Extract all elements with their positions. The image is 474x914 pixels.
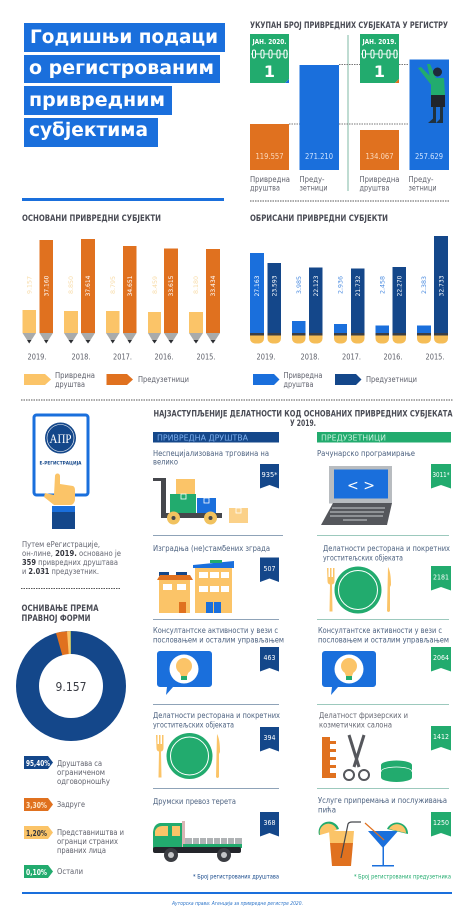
item: computer programming: Рачунарско програмирање: [317, 449, 415, 458]
bar: entrepreneurs 2020: 271.210: [305, 152, 333, 161]
year labels: [256, 352, 444, 362]
label: companies 2019: друштва: [360, 184, 390, 192]
legend: representative offices: огранци страних: [57, 837, 118, 846]
eraser pencil chart: 3.985: [295, 276, 303, 294]
eraser pencil chart: 27.163: [253, 276, 261, 296]
ribbon: 507: 507: [264, 565, 276, 573]
ribbon: 1412: 1412: [433, 733, 449, 741]
bar: entrepreneurs 2020: [300, 65, 339, 170]
icon: tablet with e-registration logo: Е-РЕГИСТРАЦИЈА: [40, 460, 82, 466]
bar: entrepreneurs 2019: 257.629: [415, 152, 443, 161]
item: beverage serving: Услуге припремања и послуживања: [318, 796, 447, 805]
item: beverage serving: пића: [318, 806, 336, 814]
legend: limited liability: 95,40%: [26, 759, 50, 768]
footnote: entrepreneurs: * Број регистрованих предузетника: [354, 874, 451, 880]
footer: copyright: Ауторска права: Агенција за привредне регистре 2020.: [171, 901, 303, 907]
icon: laptop: < >: [347, 478, 375, 494]
icon: hand cart with boxes: [153, 478, 248, 524]
panel: deleted entities: [250, 213, 448, 389]
pencil chart: 8.459: [151, 276, 159, 294]
item: restaurants companies: Делатности ресторана и покретних: [153, 711, 280, 720]
item: wholesale trade: велико: [153, 458, 178, 466]
item: building construction: [153, 544, 279, 613]
item: hair and beauty salons: козметичких салона: [319, 720, 392, 730]
bar: entrepreneurs 2019: [410, 60, 449, 170]
legend: founded: [24, 371, 189, 389]
legend: cooperatives: 3,30%: [26, 801, 47, 810]
icon: buildings: [157, 560, 234, 613]
icon: scissors: [344, 735, 369, 780]
label: companies 2019: [360, 175, 400, 192]
bar: companies 2020: [250, 124, 289, 170]
icon: drinks: [319, 822, 408, 866]
eraser pencil chart: [250, 236, 448, 344]
year labels: 2019.: [28, 352, 46, 362]
text: e-registration note: [22, 540, 121, 576]
eraser pencil chart: 23.593: [270, 276, 278, 296]
icon: truck: [153, 821, 242, 862]
pencil chart: 37.614: [84, 276, 92, 296]
icon: plate and cutlery: [156, 733, 220, 779]
legend: founded: Предузетници: [138, 375, 189, 384]
year labels: 2019.: [256, 352, 276, 362]
legend: other: 0,10%: [26, 868, 47, 877]
eraser pencil chart: 21.732: [354, 276, 362, 296]
pencil chart: [22, 239, 220, 344]
eraser pencil chart: 22.123: [312, 276, 320, 296]
eraser pencil chart: 2.458: [378, 276, 386, 294]
item: consulting entrepreneurs: [318, 626, 451, 695]
label: entrepreneurs 2020: Преду-: [300, 175, 325, 184]
bar: companies 2019: [360, 130, 399, 170]
heading: legal form: [22, 603, 99, 623]
ribbon: 2064: 2064: [433, 654, 449, 662]
bar: companies 2019: 134.067: [366, 152, 394, 161]
text: e-registration note: он-лине, 2019. основано је: [22, 549, 121, 558]
heading: deleted: ОБРИСАНИ ПРИВРЕДНИ СУБЈЕКТИ: [250, 213, 388, 223]
pencil chart: 8.795: [109, 276, 117, 294]
legend: founded: друштва: [55, 380, 85, 389]
legend: deleted: Предузетници: [366, 375, 417, 384]
label: entrepreneurs 2019: зетници: [408, 184, 436, 192]
legend: other: [24, 865, 83, 878]
icon: calendar 2020: 1: [264, 62, 275, 81]
legend: deleted: друштва: [284, 380, 314, 389]
item: consulting companies: [153, 626, 284, 695]
pencil chart: 33.434: [209, 276, 217, 296]
donut chart: [16, 631, 126, 741]
legend: founded: Привредна: [55, 371, 95, 380]
icon: idea speech bubble: [157, 651, 212, 695]
icon: comb: [322, 737, 336, 778]
heading: most common activities: [154, 408, 453, 428]
text: e-registration note: Путем еРегистрације,: [22, 540, 100, 549]
item: consulting entrepreneurs: пословањем и осталим управљањем: [318, 636, 449, 644]
item: consulting companies: пословањем и осталим управљањем: [153, 636, 284, 644]
heading: founded: ОСНОВАНИ ПРИВРЕДНИ СУБЈЕКТИ: [22, 213, 161, 223]
pencil chart: 37.160: [42, 276, 50, 296]
label: companies 2020: друштва: [250, 184, 280, 192]
year labels: 2016.: [154, 352, 174, 362]
ribbon: 1250: 1250: [433, 819, 449, 827]
title: привредним: [29, 89, 165, 111]
legend: limited liability: одговорношћу: [57, 777, 110, 786]
label: companies 2020: Привредна: [250, 175, 290, 184]
title: [24, 23, 225, 147]
pencil chart: 8.180: [192, 276, 200, 294]
label: entrepreneurs 2020: [300, 175, 328, 192]
legend: deleted: [253, 371, 417, 389]
year labels: 2018.: [72, 352, 90, 362]
footnote: companies: * Број регистрованих друштава: [193, 874, 279, 880]
item: consulting entrepreneurs: Консултантске активности у вези с: [318, 626, 442, 635]
panel: total registered: [250, 20, 449, 192]
year labels: 2015.: [426, 352, 444, 362]
year labels: 2017.: [342, 352, 361, 362]
panel: founding by legal form: [16, 603, 126, 878]
legend: limited liability: Друштава са: [57, 759, 102, 768]
icon: calendar 2020: [250, 34, 289, 83]
ribbon: 2181: 2181: [433, 574, 449, 582]
ribbon: 463: 463: [264, 654, 276, 662]
label: entrepreneurs 2020: зетници: [300, 184, 328, 192]
item: building construction: Изградња (не)стамбених зграда: [153, 544, 270, 553]
eraser pencil chart: 2.936: [336, 276, 344, 294]
ribbon: 3011: 3011*: [432, 471, 450, 479]
pencil chart: 9.157: [26, 276, 34, 294]
header: entrepreneurs: ПРЕДУЗЕТНИЦИ: [321, 434, 386, 442]
icon: calendar 2019: ЈАН. 2019.: [362, 38, 396, 46]
pencil chart: 8.850: [67, 276, 75, 294]
eraser pencil chart: 2.383: [420, 276, 428, 294]
icon: plate and cutlery: [327, 566, 391, 614]
icon: tablet with e-registration logo: АПР: [50, 431, 72, 446]
item: restaurants companies: [153, 711, 280, 779]
label: companies 2019: Привредна: [360, 175, 400, 184]
year labels: 2016.: [384, 352, 402, 362]
item: hair and beauty salons: Делатност фризерских и: [319, 711, 408, 720]
legend: representative offices: 1,20%: [26, 829, 47, 838]
heading: legal form: ОСНИВАЊЕ ПРЕМА: [22, 603, 99, 613]
item: road freight: [153, 797, 279, 862]
item: beverage serving: [318, 796, 451, 866]
icon: calendar 2019: [360, 34, 399, 83]
item: restaurants entrepreneurs: [323, 544, 451, 614]
icon: idea speech bubble: [322, 651, 376, 695]
text: e-registration note: и 2.031 предузетник.: [22, 567, 99, 576]
item: restaurants entrepreneurs: Делатности ресторана и покретних: [323, 544, 450, 553]
item: restaurants companies: угоститељских објеката: [153, 720, 234, 730]
item: consulting companies: Консултантске активности у вези с: [153, 626, 278, 635]
icon: cosmetic jars: [381, 760, 412, 782]
header: companies: [153, 432, 279, 442]
year labels: 2015.: [196, 352, 216, 362]
pencil chart: 34.651: [126, 276, 134, 296]
year labels: 2017.: [113, 352, 132, 362]
item: wholesale trade: [153, 449, 279, 524]
header: entrepreneurs: [317, 432, 451, 442]
item: hair and beauty salons: [319, 711, 451, 782]
legend: representative offices: Представништва и: [57, 828, 124, 837]
header: companies: ПРИВРЕДНА ДРУШТВА: [157, 434, 249, 442]
item: road freight: Друмски превоз терета: [153, 797, 236, 806]
ribbon: 935: 935*: [262, 471, 278, 479]
ribbon: 394: 394: [264, 734, 276, 742]
pencil chart: 33.615: [167, 276, 175, 296]
icon: woman reaching up: [418, 64, 445, 123]
item: wholesale trade: Неспецијализована трговина на: [153, 449, 269, 458]
legend: representative offices: [24, 826, 124, 855]
donut chart: 9.157: [56, 679, 86, 694]
item: restaurants entrepreneurs: угоститељских објеката: [323, 554, 403, 562]
title: Годишњи подаци: [30, 26, 218, 48]
heading: legal form: ПРАВНОЈ ФОРМИ: [22, 613, 90, 623]
icon: calendar 2020: ЈАН. 2020.: [252, 38, 286, 46]
icon: tablet with e-registration logo: [34, 415, 88, 529]
legend: deleted: Привредна: [284, 371, 323, 380]
legend: cooperatives: Задруге: [57, 800, 85, 809]
panel: founded entities: [22, 213, 220, 389]
title: о регистрованим: [29, 57, 214, 79]
bar: companies 2020: 119.557: [256, 152, 284, 161]
heading: most common activities: У 2019.: [290, 418, 316, 428]
year labels: [28, 352, 216, 362]
legend: other: Остали: [57, 867, 83, 876]
item: computer programming: [317, 449, 451, 525]
icon: calendar 2019: 1: [374, 62, 385, 81]
ribbon: 368: 368: [264, 819, 276, 827]
label: companies 2020: [250, 175, 290, 192]
legend: representative offices: правних лица: [57, 846, 106, 855]
label: entrepreneurs 2019: [408, 175, 436, 192]
text: e-registration note: 359 привредних друштава: [22, 558, 118, 567]
eraser pencil chart: 22.270: [396, 276, 404, 296]
legend: limited liability: [24, 756, 110, 786]
legend: limited liability: ограниченом: [57, 768, 105, 777]
year labels: 2018.: [300, 352, 320, 362]
legend: cooperatives: [24, 798, 85, 811]
label: entrepreneurs 2019: Преду-: [408, 175, 434, 184]
eraser pencil chart: 32.733: [438, 276, 446, 296]
title: субјектима: [29, 119, 148, 141]
